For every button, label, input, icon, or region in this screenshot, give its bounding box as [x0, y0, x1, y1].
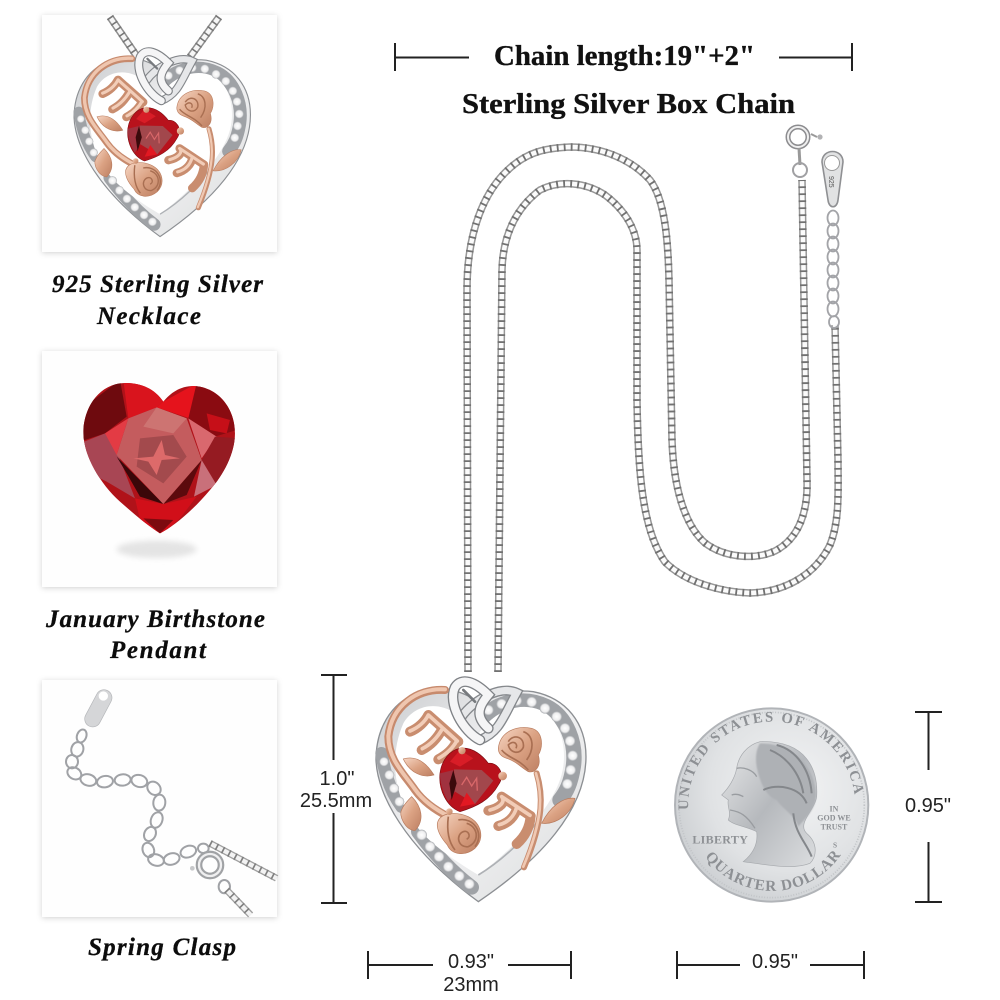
icon: red heart gem [80, 380, 240, 558]
panel: birthstone photo [42, 351, 277, 587]
caption: necklace: 925 Sterling Silver [52, 271, 263, 298]
coin: US quarter for scale: IN [830, 805, 839, 814]
heading: chain length: Chain length:19"+2" [494, 41, 755, 72]
icon: clasp and extender [65, 687, 277, 915]
icon: spring clasp on chain [788, 127, 823, 177]
icon: extender tag and links [822, 152, 843, 328]
coin: US quarter for scale: LIBERTY [692, 832, 748, 846]
coin: US quarter for scale: UNITED STATES OF AMERICA [678, 712, 864, 810]
dimension: pendant height: 25.5mm [300, 790, 372, 812]
dimension: pendant height: 1.0" [320, 768, 354, 790]
caption: necklace: Necklace [96, 303, 201, 330]
coin: US quarter for scale [674, 707, 870, 903]
caption: birthstone: January Birthstone [45, 606, 265, 633]
coin: US quarter for scale: GOD WE [817, 814, 851, 823]
small pendant [74, 52, 250, 237]
box chain [467, 147, 838, 672]
caption: birthstone: Pendant [109, 637, 207, 664]
icon: extender tag and links: 925 [827, 176, 834, 188]
dimension: pendant height [300, 675, 372, 903]
heading: chain type: Sterling Silver Box Chain [462, 89, 795, 120]
coin: US quarter for scale: TRUST [821, 823, 848, 832]
small pendant chain [110, 17, 219, 57]
caption: clasp: Spring Clasp [88, 934, 236, 961]
caption: necklace [52, 271, 263, 330]
pendant: heart with roses and garnet [376, 682, 586, 902]
coin: US quarter for scale: QUARTER DOLLAR [707, 851, 841, 891]
panel: clasp photo [42, 680, 277, 917]
dimension: pendant width: 23mm [443, 974, 499, 996]
dimension: coin height: 0.95" [905, 795, 951, 817]
dimension: chain length [395, 43, 852, 71]
dimension: coin height [905, 712, 951, 902]
caption: birthstone [45, 606, 265, 664]
dimension: pendant width: 0.93" [448, 951, 494, 973]
panel: necklace photo [42, 15, 277, 252]
dimension: coin width: 0.95" [752, 951, 798, 973]
dimension: pendant width [368, 951, 571, 996]
dimension: coin width [677, 951, 864, 979]
coin: US quarter for scale: S [833, 841, 837, 850]
